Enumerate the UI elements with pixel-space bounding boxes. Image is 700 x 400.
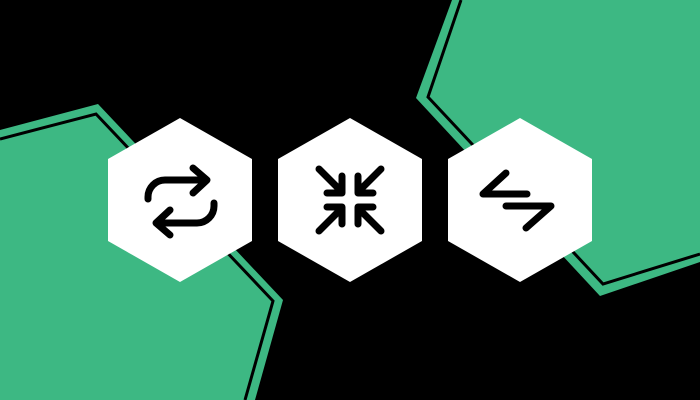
icon: compress arrows [319, 169, 381, 231]
hexagon: repeat icon [108, 118, 252, 282]
panel: right green polygon [416, 0, 700, 296]
hexagon: swap icon [448, 118, 592, 282]
hexagon: compress icon [278, 118, 422, 282]
icon: swap arrows [483, 173, 551, 228]
icon: repeat arrows [148, 168, 214, 235]
panel: left green polygon [0, 104, 283, 400]
